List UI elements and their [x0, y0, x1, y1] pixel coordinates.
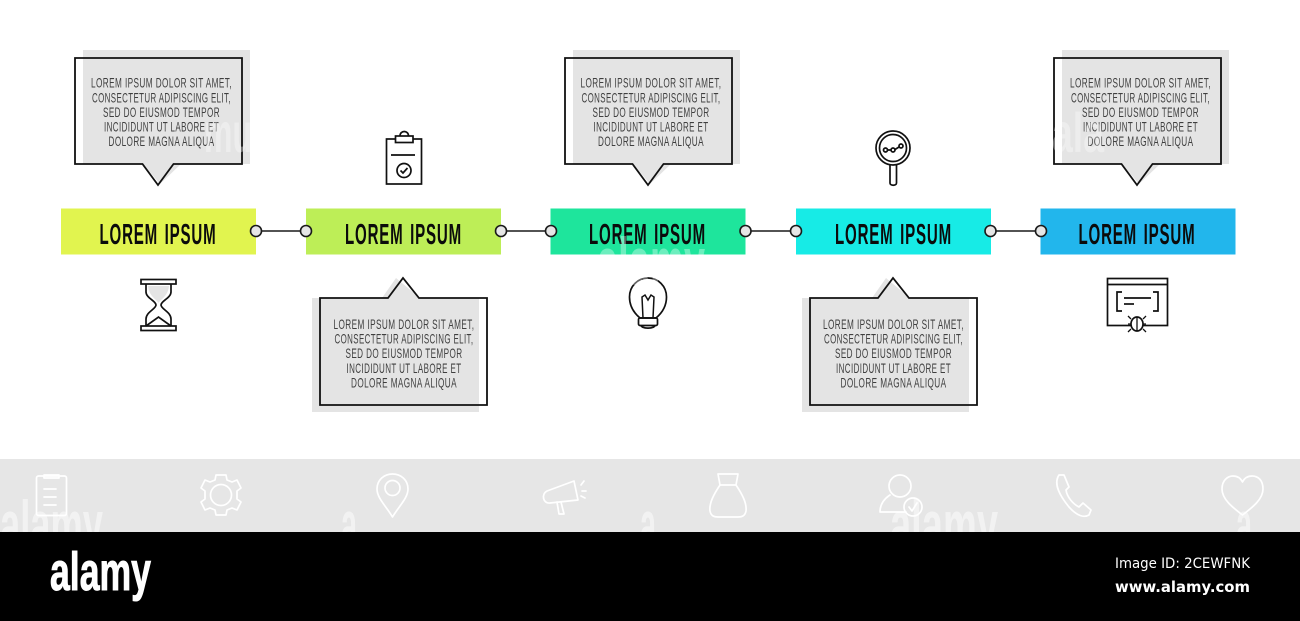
icon: white megaphone: [543, 481, 586, 514]
step 1 header bar: LOREM IPSUM: [100, 219, 216, 251]
callout: step 3 text box: DOLORE MAGNA ALIQUA: [598, 133, 704, 149]
callout: step 3 text box: CONSECTETUR ADIPISCING ELIT,: [582, 89, 720, 105]
callout: step 1 text box: SED DO EIUSMOD TEMPOR: [103, 104, 220, 120]
callout: step 1 text box: LOREM IPSUM DOLOR SIT AMET,: [91, 75, 232, 91]
footer bar: [0, 532, 1300, 621]
bottom icon strip: [0, 459, 1300, 563]
watermark text over callouts: alamy: [597, 224, 705, 300]
callout: step 4 text box: LOREM IPSUM DOLOR SIT AMET,: [823, 316, 964, 332]
image id: Image ID: 2CEWFNK: [1115, 556, 1251, 572]
callout: step 4 text box: SED DO EIUSMOD TEMPOR: [835, 345, 952, 361]
strip watermark text: alamy: [0, 487, 103, 563]
callout: step 1 text box: INCIDIDUNT UT LABORE ET: [104, 118, 219, 134]
step 4 header bar: LOREM IPSUM: [835, 219, 952, 251]
connector: step 1 to 2: [250, 226, 312, 236]
icon: white money bag: [710, 474, 746, 517]
step 3 header bar: [550, 208, 746, 254]
website: www.alamy.com: [1115, 578, 1250, 596]
watermark text over callouts: mu: [204, 101, 252, 164]
step 5 header bar: [1040, 208, 1236, 254]
watermark text over callouts: [204, 101, 1105, 300]
callout: step 3 text box: INCIDIDUNT UT LABORE ET: [594, 118, 708, 134]
callout: step 1 text box: [75, 50, 250, 185]
connector: step 4 to 5: [985, 226, 1046, 236]
footer logo: alamy: [50, 542, 151, 602]
callout: step 2 text box: SED DO EIUSMOD TEMPOR: [346, 345, 462, 361]
callout: step 2 text box: [312, 278, 487, 412]
callout: step 2 text box: CONSECTETUR ADIPISCING ELIT,: [334, 331, 474, 347]
callout: step 1 text box: DOLORE MAGNA ALIQUA: [108, 133, 214, 149]
callout: step 4 text box: INCIDIDUNT UT LABORE ET: [836, 360, 951, 376]
callout: step 4 text box: DOLORE MAGNA ALIQUA: [840, 374, 946, 390]
strip watermark text: a: [640, 487, 656, 563]
icon: magnifier with chart: [876, 131, 910, 185]
icon: white heart: [1222, 476, 1263, 515]
connector: step 2 to 3: [496, 226, 556, 236]
step 2 header bar: LOREM IPSUM: [345, 219, 462, 251]
callout: step 2 text box: LOREM IPSUM DOLOR SIT AMET,: [334, 316, 474, 332]
callout: step 3 text box: LOREM IPSUM DOLOR SIT AMET,: [580, 75, 722, 91]
callout: step 5 text box: SED DO EIUSMOD TEMPOR: [1082, 104, 1199, 120]
bottom icon strip: a: [1236, 487, 1252, 563]
strip watermark text: alamy: [890, 487, 998, 563]
icon: white phone: [1057, 475, 1091, 516]
strip watermark text: [0, 487, 1252, 563]
step 1 header bar: [61, 208, 256, 254]
callout: step 3 text box: SED DO EIUSMOD TEMPOR: [592, 104, 710, 120]
callout: step 3 text box: [565, 50, 740, 185]
watermark text over callouts: ala: [1052, 101, 1105, 164]
step 4 header bar: [796, 208, 991, 254]
strip watermark text: a: [341, 487, 357, 563]
callout: step 2 text box: DOLORE MAGNA ALIQUA: [351, 374, 457, 390]
callout: step 4 text box: CONSECTETUR ADIPISCING ELIT,: [824, 331, 963, 347]
callout: step 2 text box: INCIDIDUNT UT LABORE ET: [346, 360, 462, 376]
callout: step 4 text box: [802, 278, 977, 412]
callout: step 5 text box: [1054, 50, 1229, 185]
step 2 header bar: [306, 208, 501, 254]
icon: white map pin: [377, 474, 408, 517]
icon: light bulb: [630, 278, 666, 328]
callout: step 5 text box: INCIDIDUNT UT LABORE ET: [1083, 118, 1198, 134]
callout: step 5 text box: DOLORE MAGNA ALIQUA: [1088, 133, 1194, 149]
step 5 header bar: LOREM IPSUM: [1078, 219, 1196, 251]
icon: white clipboard: [36, 475, 66, 516]
icon: white gear: [201, 475, 241, 515]
connector: step 3 to 4: [740, 226, 802, 236]
callout: step 1 text box: CONSECTETUR ADIPISCING ELIT,: [92, 89, 231, 105]
icon: clipboard with check: [386, 132, 422, 184]
icon: browser bug window: [1108, 278, 1168, 332]
icon: hourglass: [141, 280, 176, 330]
step 3 header bar: LOREM IPSUM: [589, 219, 706, 251]
icon: white verified user: [880, 475, 922, 516]
